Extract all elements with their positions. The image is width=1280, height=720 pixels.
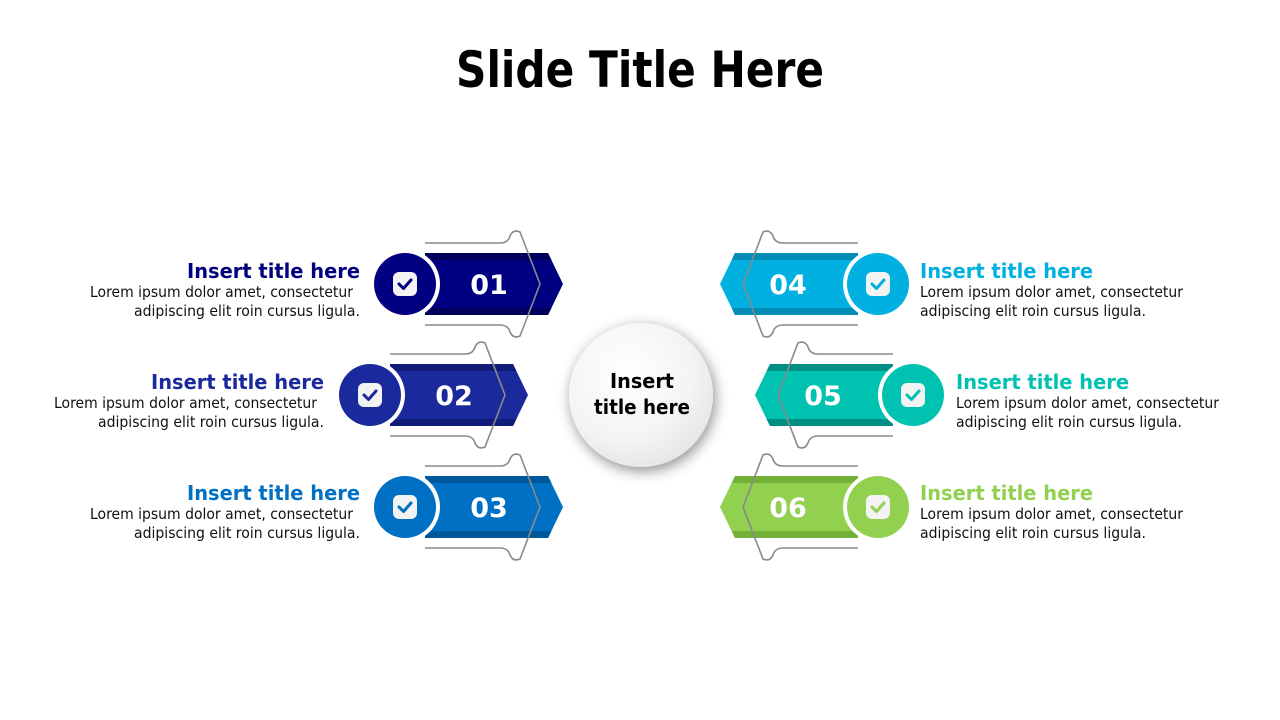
item 01: 01 — [470, 270, 508, 301]
text: item 01: Lorem ipsum dolor amet, consectetur — [90, 283, 354, 301]
item 03: 03 — [470, 493, 508, 524]
item 02: 02 — [435, 381, 473, 412]
item 02 — [335, 342, 528, 448]
text: item 04 — [920, 259, 1184, 320]
text: item 02 — [54, 370, 324, 431]
text: item 04: Insert title here — [920, 259, 1093, 283]
center circle — [569, 323, 713, 467]
text: item 06 — [920, 481, 1184, 542]
text: item 01: Insert title here — [187, 259, 360, 283]
text: item 06: adipiscing elit roin cursus ligula. — [920, 524, 1146, 542]
text: item 05: adipiscing elit roin cursus ligula. — [956, 413, 1182, 431]
item 04 — [720, 231, 913, 337]
text: item 03: adipiscing elit roin cursus ligula. — [134, 524, 360, 542]
title: Slide Title Here — [456, 41, 824, 99]
text: item 04: Lorem ipsum dolor amet, consectetur — [920, 283, 1184, 301]
text: item 03: Insert title here — [187, 481, 360, 505]
text: item 04: adipiscing elit roin cursus ligula. — [920, 302, 1146, 320]
text: item 02: Lorem ipsum dolor amet, consectetur — [54, 394, 318, 412]
text: item 06: Insert title here — [920, 481, 1093, 505]
text: item 05: Lorem ipsum dolor amet, consectetur — [956, 394, 1220, 412]
text: item 03 — [90, 481, 360, 542]
text: item 05 — [956, 370, 1220, 431]
text: item 06: Lorem ipsum dolor amet, consectetur — [920, 505, 1184, 523]
center circle: Insert — [610, 369, 674, 393]
item 01 — [370, 231, 563, 337]
item 04: 04 — [769, 270, 807, 301]
text: item 01 — [90, 259, 360, 320]
text: item 01: adipiscing elit roin cursus ligula. — [134, 302, 360, 320]
item 05 — [755, 342, 948, 448]
item 06 — [720, 454, 913, 560]
text: item 03: Lorem ipsum dolor amet, consectetur — [90, 505, 354, 523]
text: item 02: adipiscing elit roin cursus ligula. — [98, 413, 324, 431]
item 06: 06 — [769, 493, 807, 524]
item 05: 05 — [804, 381, 842, 412]
item 03 — [370, 454, 563, 560]
center circle: title here — [594, 395, 690, 419]
text: item 05: Insert title here — [956, 370, 1129, 394]
text: item 02: Insert title here — [151, 370, 324, 394]
